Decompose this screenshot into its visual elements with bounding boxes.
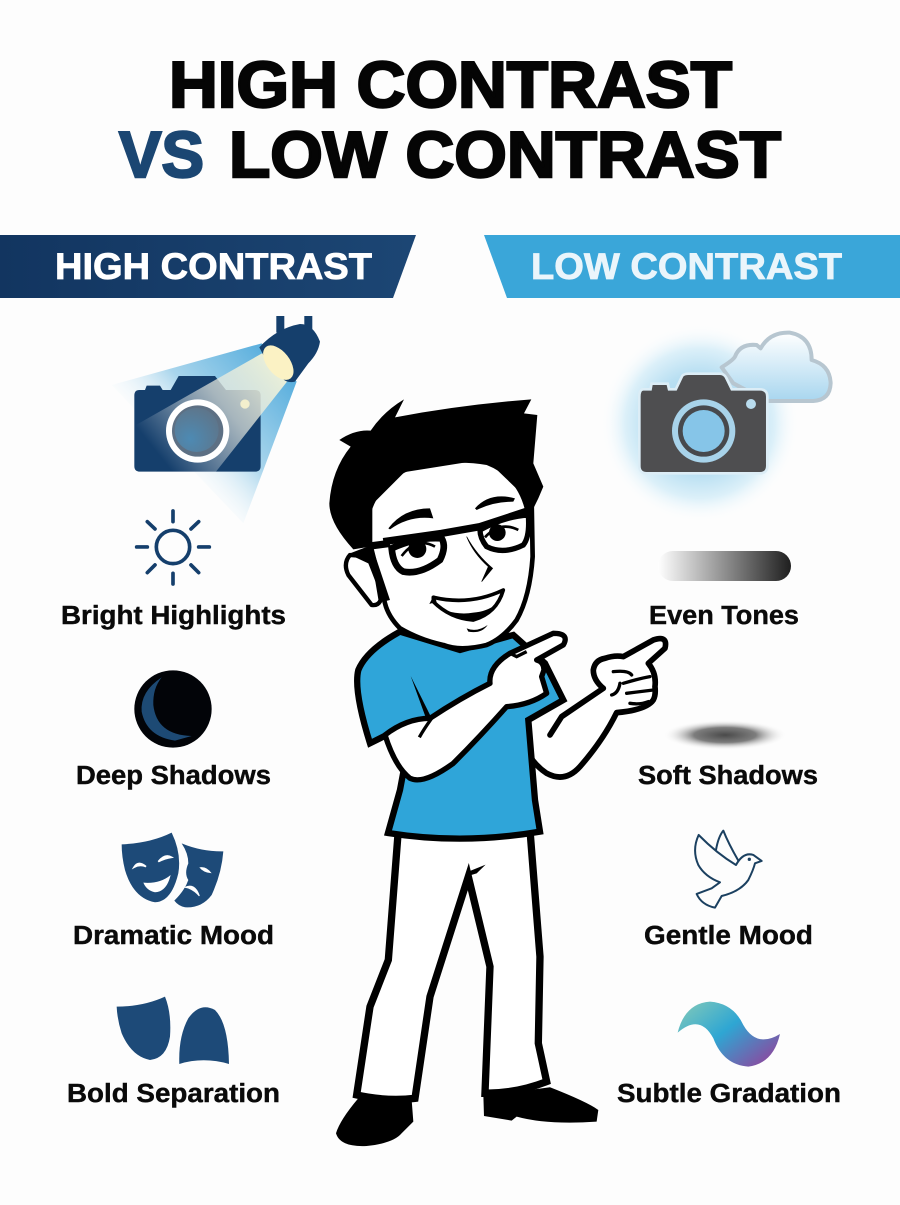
icon: even tones bar [658, 551, 791, 581]
title line 2: LOW CONTRAST [229, 118, 781, 191]
nose [467, 537, 493, 582]
icon: soft shadow ellipse [663, 720, 787, 750]
banner: low contrast [484, 235, 900, 298]
camera body [134, 376, 261, 472]
icon: deep shadow moon [134, 670, 212, 748]
label: bold separation: Bold Separation [67, 1080, 280, 1108]
sideburn [348, 545, 390, 602]
near arm with pointing hand [385, 633, 565, 780]
label: bright highlights: Bright Highlights [61, 602, 286, 630]
label: subtle gradation: Subtle Gradation [617, 1080, 841, 1108]
trousers [357, 830, 547, 1099]
face [370, 457, 533, 648]
mouth [433, 590, 503, 620]
light beam inner [134, 352, 288, 472]
far arm with pointing hand [520, 639, 666, 777]
icon: sun [137, 511, 209, 584]
icon: soft camera with cloud [600, 323, 831, 523]
shoes [336, 1087, 598, 1146]
ear [346, 555, 381, 605]
label: even tones: Even Tones [649, 602, 799, 630]
camera lens [672, 399, 735, 463]
banner: high contrast: HIGH CONTRAST [55, 246, 372, 287]
title [119, 48, 781, 191]
glasses [370, 511, 529, 572]
t-shirt [357, 632, 563, 839]
label: soft shadows: Soft Shadows [638, 762, 818, 790]
camera lens [166, 399, 229, 463]
cloud [722, 333, 831, 401]
soft glow [600, 323, 800, 523]
label: deep shadows: Deep Shadows [76, 762, 271, 790]
camera body [641, 375, 766, 472]
banner: high contrast [0, 235, 416, 298]
icon: bold separation shapes [117, 997, 229, 1064]
eyes [402, 524, 518, 558]
character: man pointing [329, 399, 666, 1146]
icon: gradient wave [678, 1002, 780, 1067]
label: gentle mood: Gentle Mood [644, 922, 813, 950]
hair [329, 399, 543, 549]
comedy mask [122, 833, 179, 902]
camera flash dot [240, 399, 250, 409]
light beam outer [112, 343, 297, 523]
spotlight lamp [257, 316, 320, 385]
title line 1: HIGH CONTRAST [169, 48, 732, 121]
camera flash dot [746, 399, 756, 409]
title line 2: VS [119, 118, 204, 191]
banner: low contrast: LOW CONTRAST [531, 246, 842, 287]
icon: dove [695, 831, 762, 908]
icon: camera under spotlight [112, 316, 320, 523]
eyebrows [388, 496, 515, 529]
facial features [348, 496, 529, 632]
icon: theatre masks [122, 833, 223, 907]
label: dramatic mood: Dramatic Mood [73, 922, 274, 950]
tragedy mask [174, 843, 223, 907]
